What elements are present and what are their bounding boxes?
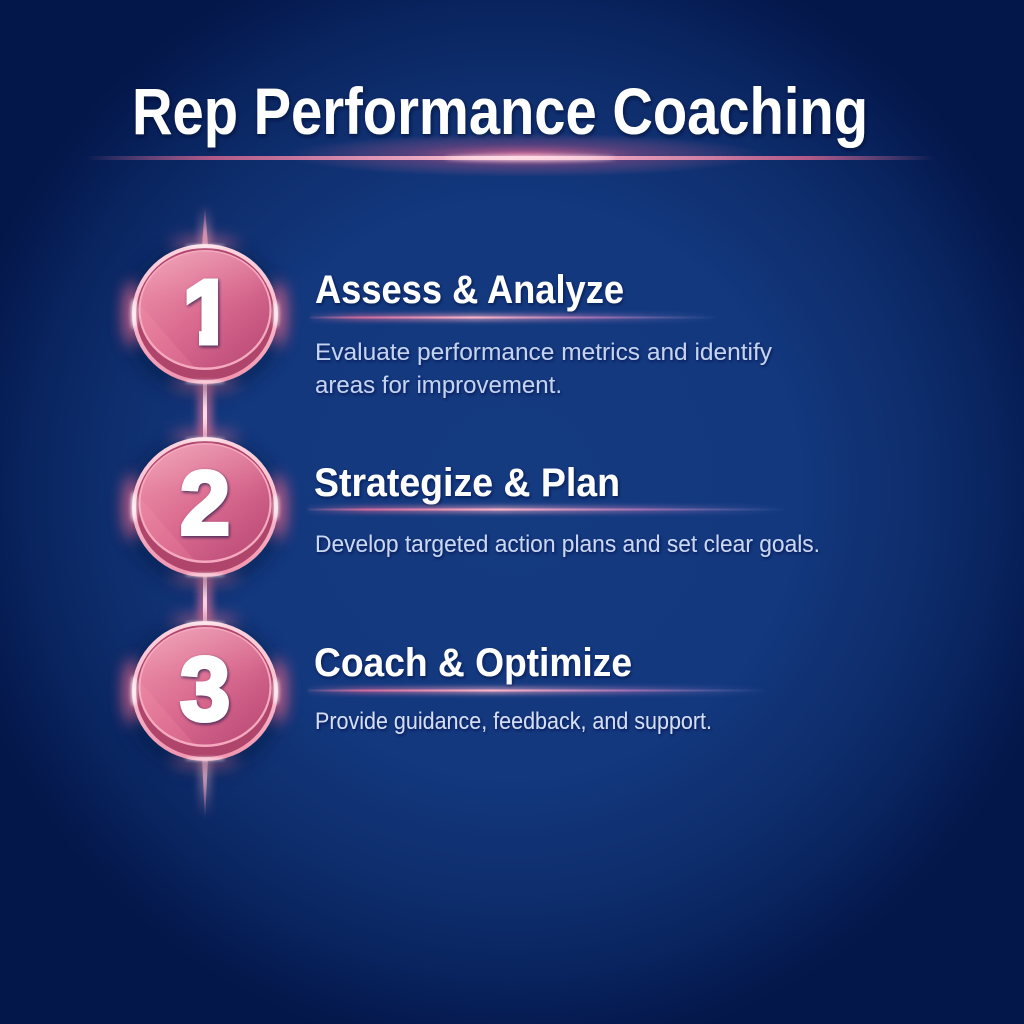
step 1 description: areas for improvement. bbox=[315, 372, 562, 399]
connector lines and light flares bbox=[198, 205, 212, 822]
title: Rep Performance Coaching bbox=[132, 74, 868, 148]
step 1 description bbox=[315, 339, 772, 399]
step 1 heading: Assess & Analyze bbox=[315, 268, 624, 312]
step 3 heading: Coach & Optimize bbox=[314, 641, 632, 685]
step 2 badge: 2 bbox=[180, 454, 230, 554]
step 3 badge bbox=[125, 601, 285, 772]
step 3 text bbox=[308, 641, 768, 735]
step 2 heading: Strategize & Plan bbox=[314, 461, 620, 505]
step 1 badge: 1 bbox=[183, 263, 233, 363]
step 1 badge bbox=[125, 224, 285, 395]
step 1 divider bbox=[310, 314, 720, 321]
step 2 text bbox=[308, 461, 820, 558]
step 3 description: Provide guidance, feedback, and support. bbox=[315, 708, 712, 735]
step 1 text bbox=[310, 268, 772, 399]
step 1 description: Evaluate performance metrics and identify bbox=[315, 339, 772, 366]
step 3 divider bbox=[308, 687, 768, 694]
step 2 description: Develop targeted action plans and set clear goals. bbox=[315, 531, 820, 558]
title divider glow bbox=[85, 133, 935, 177]
step 2 badge bbox=[125, 417, 285, 588]
step 3 badge: 3 bbox=[180, 640, 230, 740]
step 2 divider bbox=[308, 506, 788, 513]
